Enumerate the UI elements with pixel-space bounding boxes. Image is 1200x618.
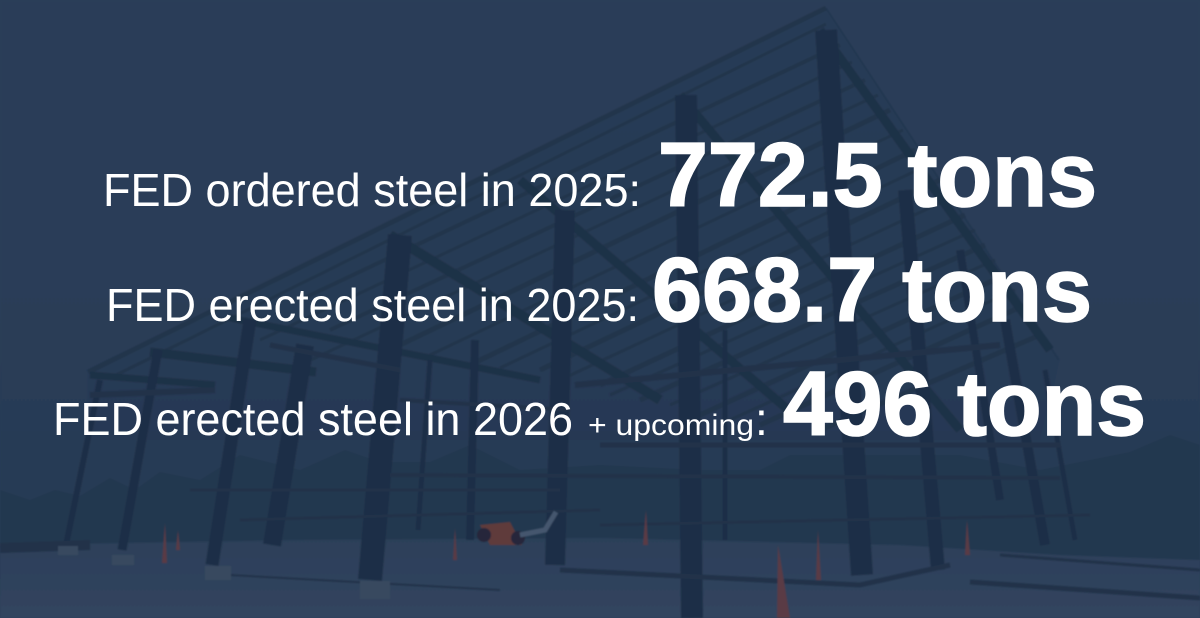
stat line 2: erected steel 2025 (106, 240, 1092, 341)
label: FED erected steel in 2025: (106, 279, 639, 331)
horizontal beams (0, 345, 1200, 598)
colon: : (755, 393, 768, 445)
building shadow under roof (88, 8, 1059, 440)
stat line 3: erected steel 2026 + upcoming (53, 354, 1146, 455)
orange lift (477, 512, 556, 545)
footings and cones (58, 510, 970, 618)
tree line (0, 435, 1200, 560)
upcoming note: + upcoming (588, 409, 754, 442)
value: 496 tons (783, 354, 1146, 455)
roof rafters (90, 30, 1050, 430)
ground (0, 538, 1200, 618)
stat line 1: ordered steel 2025 (103, 125, 1097, 226)
label: FED ordered steel in 2025: (103, 164, 641, 216)
roof purlins (88, 8, 1059, 430)
value: 668.7 tons (652, 240, 1092, 341)
value: 772.5 tons (658, 125, 1097, 226)
label: FED erected steel in 2026 (53, 393, 573, 445)
